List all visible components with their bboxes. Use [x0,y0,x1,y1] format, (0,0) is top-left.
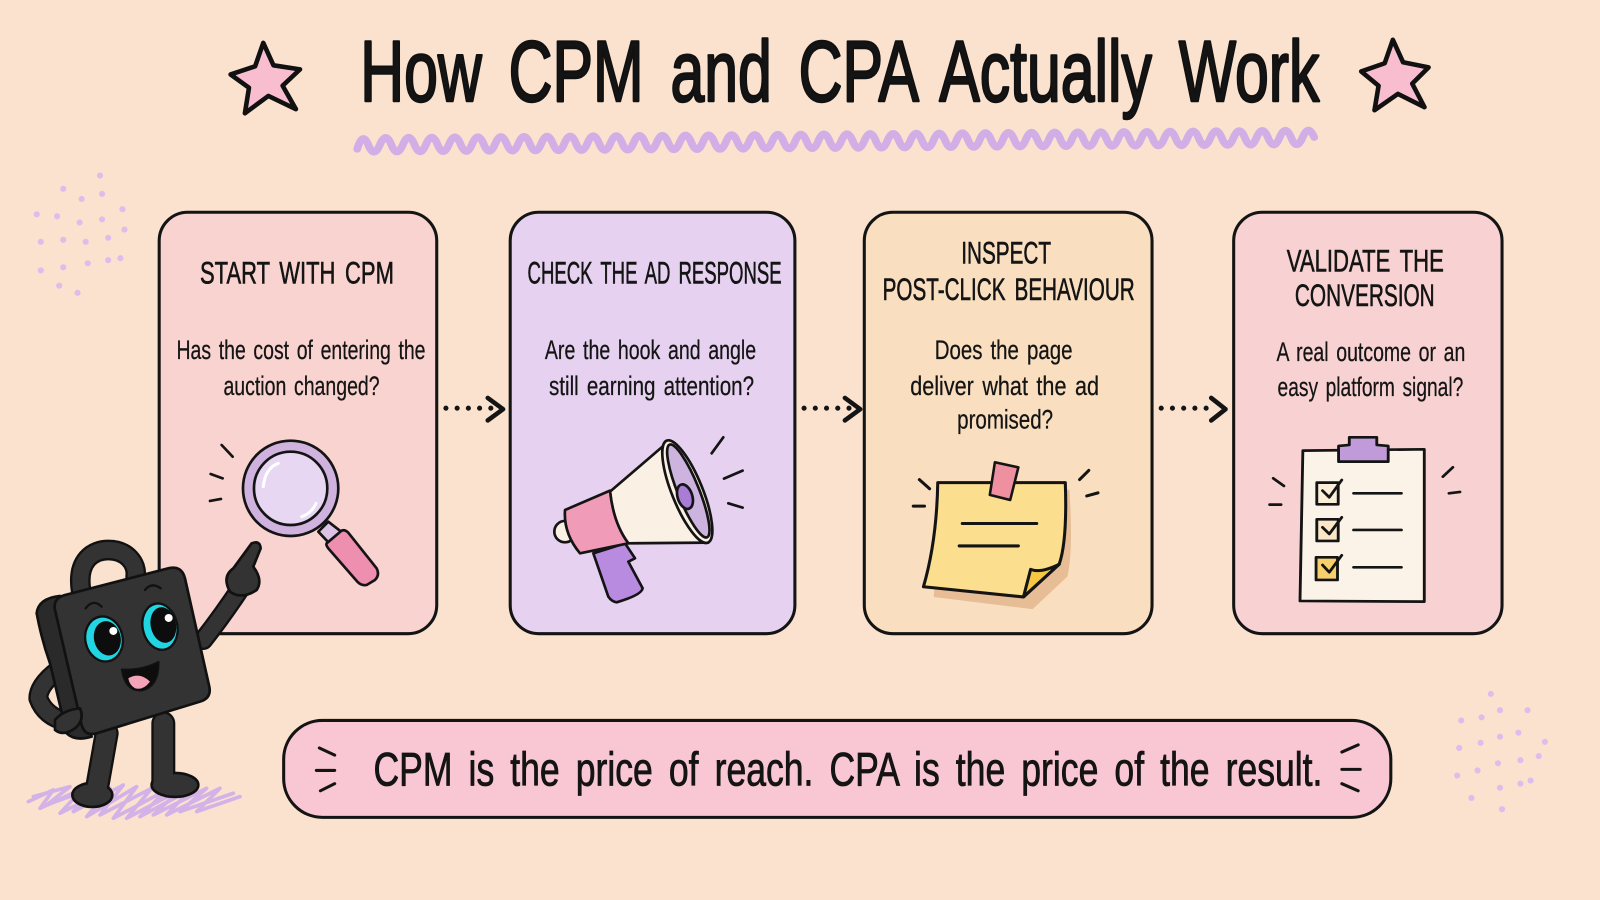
pointing hand [227,542,261,595]
card text: start with CPM: Has the cost of entering the [177,335,426,365]
smile [122,662,159,691]
card heading: inspect post-click behaviour [883,234,1135,307]
icon: megaphone [554,435,743,602]
character: padlock mascot [28,542,261,818]
arrow: step 1 to 2 [443,398,503,420]
icon: sticky note [913,462,1098,609]
card heading: validate the conversion: VALIDATE THE [1287,242,1444,278]
card text: inspect post-click behaviour: deliver what the ad [910,371,1099,401]
card text: start with CPM [177,335,426,401]
tongue [128,676,150,689]
eyebrows [86,585,161,608]
arrow: step 3 to 4 [1159,398,1226,420]
right eye [138,600,182,653]
card text: validate the conversion: easy platform signal? [1278,372,1463,402]
card heading: check the ad response: CHECK THE AD RESPONSE [528,255,782,291]
card text: check the ad response: still earning attention? [549,371,754,401]
icon: left star [231,43,300,113]
title underline squiggle [357,130,1314,152]
left eye [81,613,127,665]
card text: check the ad response [545,335,756,401]
decorative dots: top left [34,172,128,296]
card heading: inspect post-click behaviour: INSPECT [961,234,1051,270]
card text: inspect post-click behaviour [910,335,1099,435]
arrow: step 2 to 3 [802,398,860,420]
card heading: start with CPM: START WITH CPM [200,255,394,291]
panel: validate the conversion [1234,212,1502,634]
card text: check the ad response: Are the hook and angle [545,335,756,365]
callout: key message pill [284,720,1391,817]
panel: start with CPM [159,212,437,634]
card text: validate the conversion: A real outcome or an [1277,337,1465,367]
ground scribble [28,785,240,818]
panel: inspect post-click behaviour [864,212,1152,634]
icon: clipboard checklist [1270,437,1460,602]
shackle [80,550,136,590]
arms [38,587,242,722]
callout sparks: left [316,748,335,791]
card heading: validate the conversion: CONVERSION [1295,277,1435,313]
card heading: inspect post-click behaviour: POST-CLICK BEHAVIOUR [883,271,1135,307]
legs [72,723,198,807]
body [55,568,210,734]
card text: inspect post-click behaviour: Does the page [935,335,1072,365]
card text: inspect post-click behaviour: promised? [957,405,1053,435]
icon: right star [1361,40,1429,110]
panel: check the ad response [510,212,795,634]
decorative dots: bottom right [1454,691,1548,812]
callout text: CPM is the price of reach. CPA is the price of the result. [373,744,1322,796]
card text: start with CPM: auction changed? [223,371,380,401]
card heading: validate the conversion [1287,242,1444,313]
icon: magnifying glass [210,441,378,585]
card text: validate the conversion [1277,337,1465,402]
back of body [37,596,92,739]
hip hand [55,708,82,733]
callout sparks: right [1342,745,1360,791]
